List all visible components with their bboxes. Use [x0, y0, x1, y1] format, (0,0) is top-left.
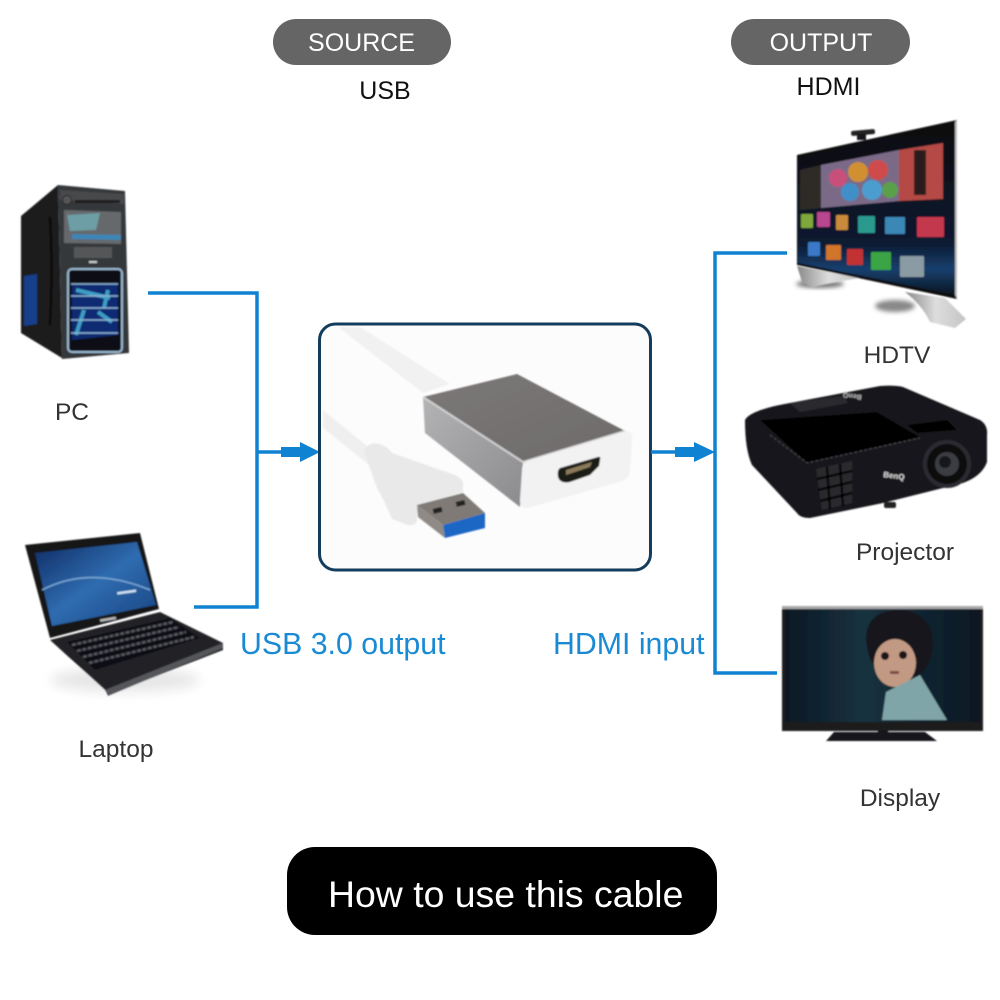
icon: display — [782, 606, 983, 741]
icon: projector: BenQ — [842, 391, 862, 400]
label: Laptop: Laptop — [79, 736, 153, 763]
icon: laptop — [25, 533, 223, 696]
label: Display: Display — [860, 785, 941, 812]
connector: source lines — [148, 293, 300, 607]
label: PC: PC — [55, 399, 89, 426]
icon: PC tower — [21, 185, 129, 359]
badge: output — [731, 19, 910, 65]
icon: USB to HDMI adapter — [323, 327, 632, 538]
arrow: into adapter — [281, 442, 320, 462]
arrow: out of adapter — [675, 442, 715, 462]
title banner: How to use this cable — [328, 873, 683, 915]
label: Projector: Projector — [856, 539, 954, 566]
icon: projector: BenQ — [883, 470, 905, 482]
icon: HDTV — [796, 120, 966, 328]
label: USB: USB — [359, 77, 411, 105]
badge: output: OUTPUT — [770, 29, 872, 57]
icon: projector — [745, 386, 987, 518]
title banner — [287, 847, 717, 935]
badge: source — [273, 19, 451, 65]
connector: output lines — [651, 253, 787, 673]
label: USB 3.0 output: USB 3.0 output — [240, 628, 446, 661]
label: HDMI: HDMI — [797, 73, 860, 101]
label: HDMI input: HDMI input — [553, 628, 705, 661]
label: HDTV: HDTV — [864, 342, 931, 369]
panel: adapter photo — [320, 324, 650, 570]
badge: source: SOURCE — [308, 29, 415, 57]
